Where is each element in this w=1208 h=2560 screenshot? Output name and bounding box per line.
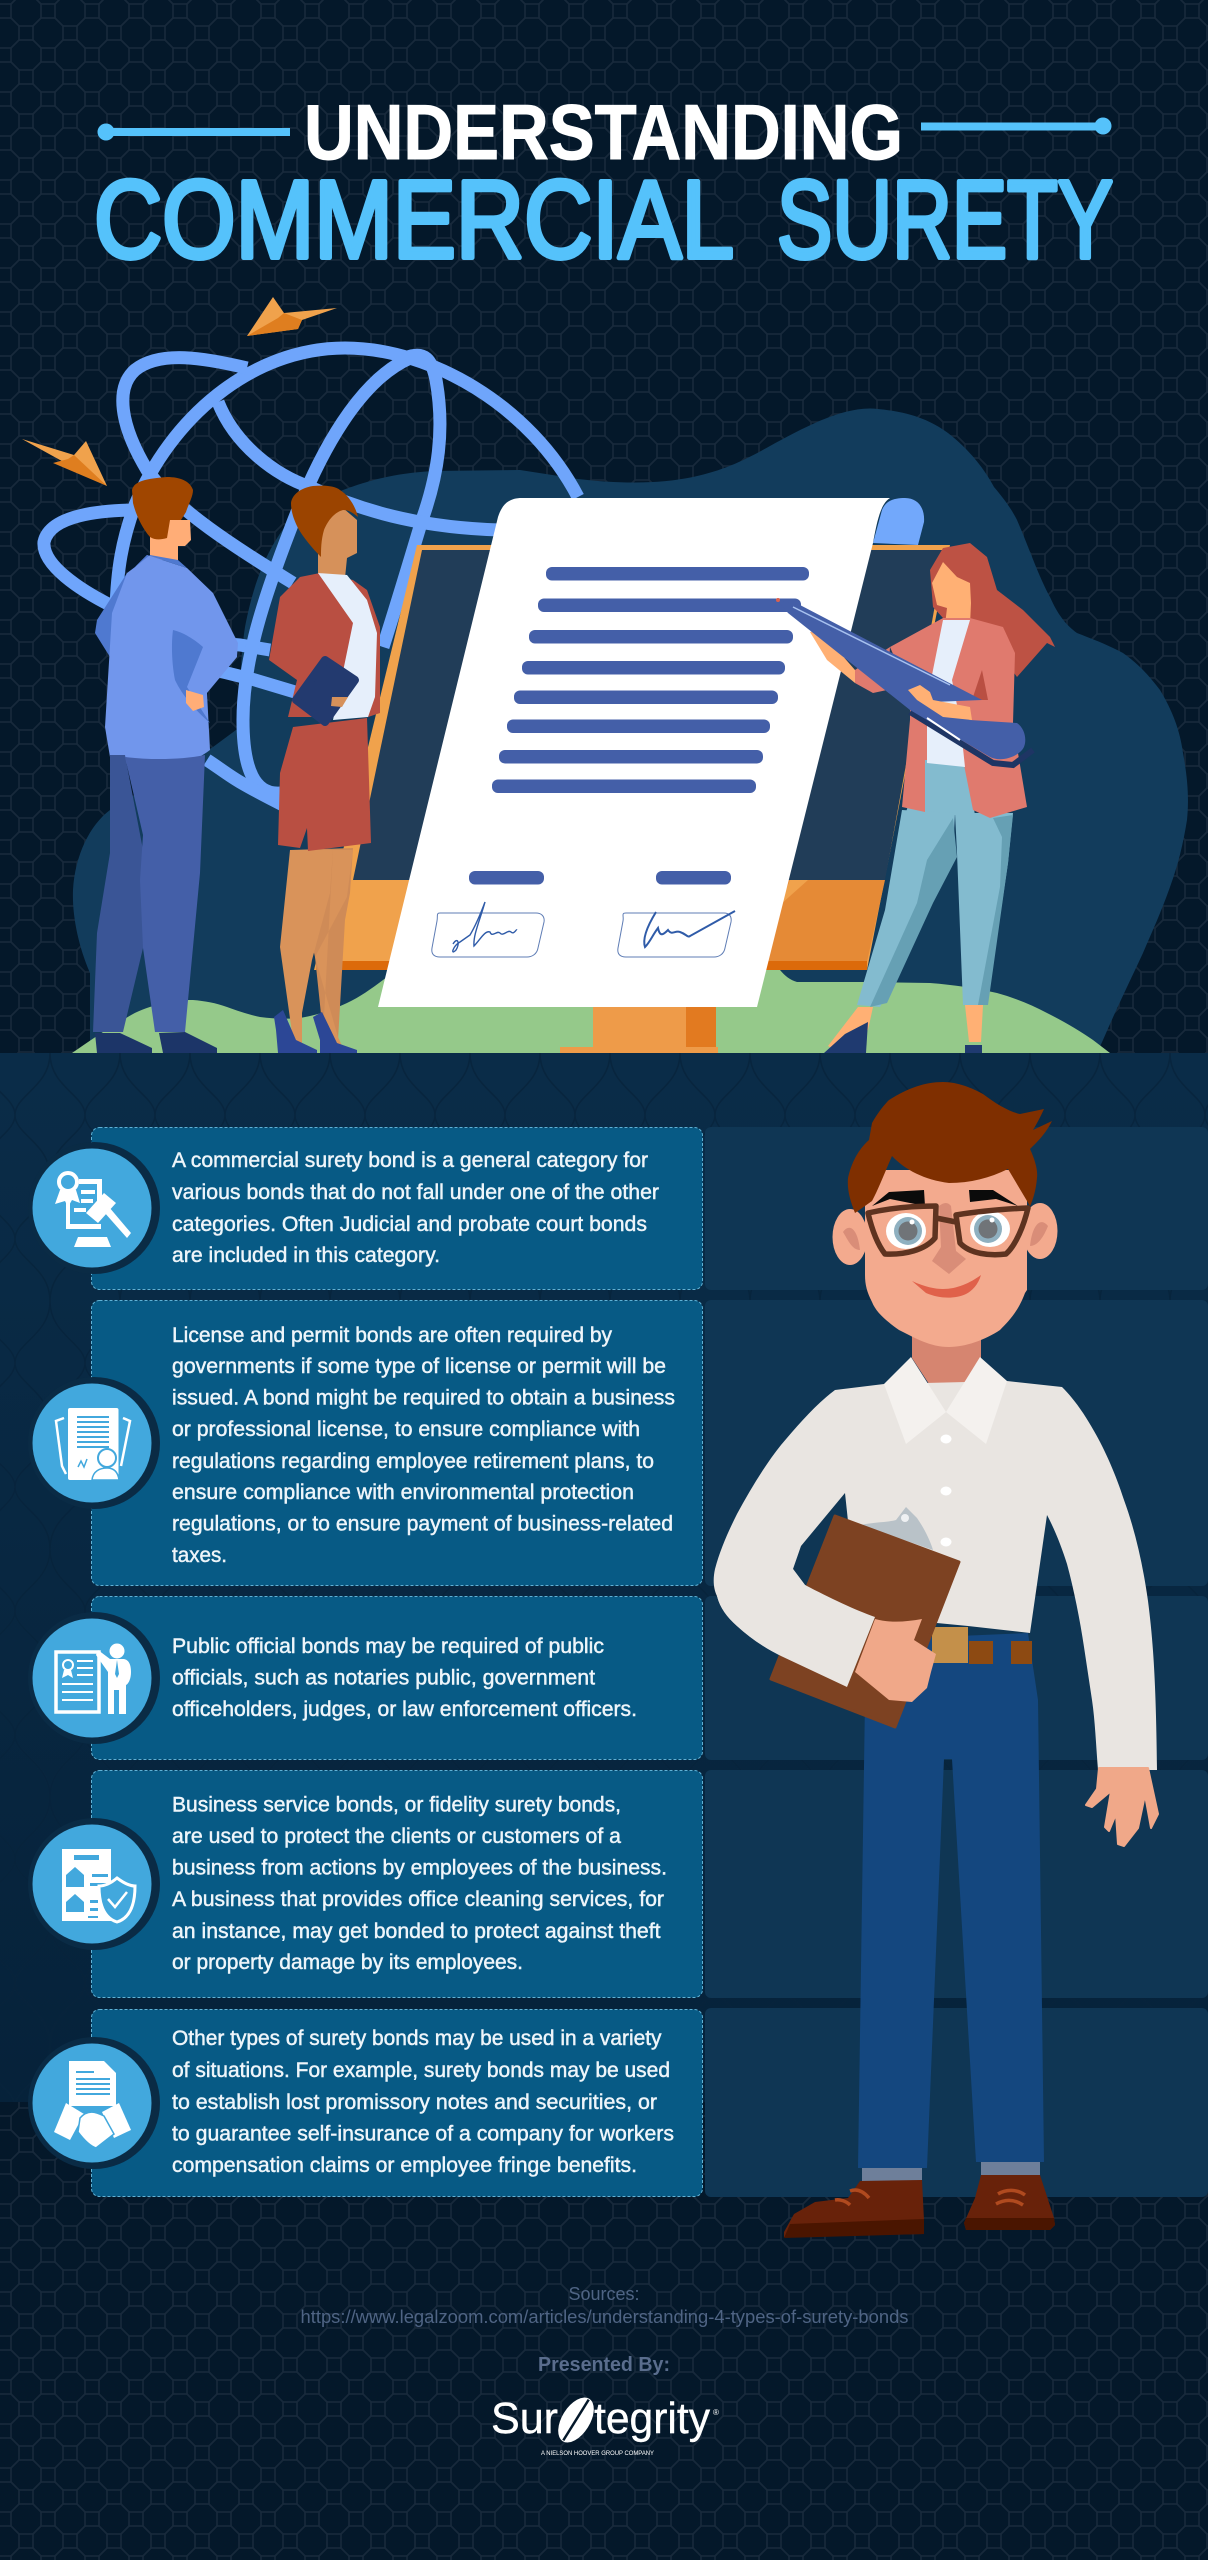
card five text: to guarantee self-insurance of a company for workers: [172, 2122, 674, 2146]
logo leaf: [551, 2391, 601, 2449]
clipboard: [771, 1516, 959, 1727]
title line two: COMMERCIAL: [94, 158, 734, 282]
card four text: are used to protect the clients or customers of a: [172, 1825, 621, 1848]
card five text: compensation claims or employee fringe benefits.: [172, 2154, 637, 2177]
card five icon badge: [28, 2037, 160, 2169]
large pen: [776, 598, 1033, 765]
man with clipboard: [714, 1082, 1158, 2238]
right band panels: [705, 1127, 1208, 2197]
card two text: or professional license, to ensure compliance with: [172, 1418, 640, 1441]
eyes: [886, 1211, 1010, 1249]
eyebrows: [872, 1190, 1018, 1206]
card two text: regulations regarding employee retirement plans, to: [172, 1450, 654, 1473]
face: [865, 1170, 1027, 1347]
card four text: A business that provides office cleaning services, for: [172, 1888, 664, 1911]
card two text: regulations, or to ensure payment of business-related: [172, 1512, 673, 1536]
document roll curl: [873, 498, 924, 545]
card five text: to establish lost promissory notes and securities, or: [172, 2091, 657, 2114]
icon: contract and handshake: [54, 2061, 131, 2148]
document text lines: [469, 567, 809, 884]
arm gap: [793, 1493, 875, 1617]
glasses: [868, 1206, 1028, 1255]
registered mark: ®: [713, 2408, 719, 2417]
woman shirt: [318, 573, 377, 720]
woman with pen: [776, 543, 1055, 1053]
woman jacket: [269, 573, 380, 717]
woman heels: [274, 1010, 357, 1053]
paper plane top: [247, 297, 337, 336]
card four text: or property damage by its employees.: [172, 1951, 523, 1974]
card two text: License and permit bonds are often required by: [172, 1324, 612, 1347]
shirt: [714, 1381, 1157, 1770]
card four text: Business service bonds, or fidelity surety bonds,: [172, 1794, 621, 1816]
card two text: issued. A bond might be required to obtain a business: [172, 1386, 675, 1410]
card four background: [92, 1770, 702, 1998]
left shoe: [784, 2180, 924, 2238]
belt: [932, 1627, 1032, 1664]
card three text: Public official bonds may be required of public: [172, 1635, 604, 1658]
green ground: [72, 960, 1110, 1053]
pen woman forearm: [810, 630, 890, 693]
logo wordmark end: tegrity: [594, 2394, 710, 2443]
signature two: [618, 911, 735, 957]
icon: licence document: [56, 1408, 130, 1480]
pen woman feet: [824, 1005, 983, 1053]
card four text: [172, 1794, 667, 1974]
icon: certificate and gavel: [55, 1173, 131, 1247]
woman clutch: [296, 660, 355, 722]
card five text: of situations. For example, surety bonds may be used: [172, 2059, 670, 2082]
ears: [832, 1203, 1058, 1265]
card three text: officeholders, judges, or law enforcement officers.: [172, 1698, 637, 1721]
sources: Sources:: [568, 2284, 640, 2304]
signature one: [432, 902, 544, 957]
man trousers: [93, 755, 205, 1032]
left hand: [855, 1619, 936, 1702]
hero illustration: [22, 297, 1188, 1053]
paper plane left: [22, 439, 107, 486]
card two icon badge: [28, 1377, 160, 1509]
title decorative line left: [98, 124, 290, 140]
info section background: [0, 1053, 1208, 2102]
nose: [932, 1203, 966, 1274]
icon: property list and shield: [62, 1849, 135, 1922]
woman in red: [269, 486, 380, 1053]
shirt buttons: [940, 1434, 952, 1546]
signed document: [378, 498, 890, 1007]
title decorative line right: [921, 118, 1112, 134]
card two text: ensure compliance with environmental protection: [172, 1481, 634, 1504]
pen woman hand: [908, 685, 972, 720]
card one text: are included in this category.: [172, 1244, 440, 1267]
right hand: [1086, 1768, 1158, 1846]
card one text: A commercial surety bond is a general category for: [172, 1149, 648, 1172]
logo wordmark: Sur: [491, 2394, 558, 2443]
panel: card one: [28, 1128, 702, 1290]
left sleeve over clipboard: [715, 1564, 875, 1687]
background blob: [73, 409, 1188, 1053]
card four icon badge: [28, 1818, 160, 1950]
globe: [44, 348, 578, 806]
man neck and face: [150, 520, 191, 560]
card one icon badge: [28, 1142, 160, 1274]
card five text: [172, 2027, 674, 2177]
woman legs: [280, 848, 353, 1048]
monitor stand: [560, 1000, 718, 1053]
woman hand: [331, 697, 348, 707]
card two text: taxes.: [172, 1544, 227, 1567]
card two text: governments if some type of license or permit will be: [172, 1355, 666, 1378]
card four text: an instance, may get bonded to protect against theft: [172, 1920, 661, 1943]
icon: official presenting document: [56, 1644, 131, 1714]
pen woman jacket: [890, 618, 1027, 818]
monitor: [314, 545, 950, 970]
man sweater: [105, 555, 238, 767]
man hair: [132, 477, 193, 539]
panel: card three: [28, 1596, 702, 1760]
man in blue: [93, 477, 238, 1053]
logo: [491, 2391, 719, 2457]
panel: card two: [28, 1300, 702, 1586]
pen woman hair: [930, 543, 1055, 677]
card one text: various bonds that do not fall under one of the other: [172, 1181, 659, 1204]
woman hair: [291, 486, 358, 557]
card one background: [92, 1128, 702, 1290]
card two text: [172, 1324, 675, 1567]
logo tagline: A NIELSON HOOVER GROUP COMPANY: [541, 2450, 655, 2457]
trousers: [858, 1633, 1044, 2168]
card three text: [172, 1635, 637, 1721]
woman face and neck: [318, 508, 357, 578]
sources: [300, 2284, 908, 2327]
title: [94, 88, 1113, 282]
card three background: [92, 1596, 702, 1760]
card three text: officials, such as notaries public, government: [172, 1666, 595, 1690]
panel: card four: [28, 1770, 702, 1998]
card one text: categories. Often Judicial and probate court bonds: [172, 1213, 647, 1236]
man shoes: [95, 1032, 217, 1053]
collar: [884, 1357, 1007, 1444]
socks: [862, 2162, 1040, 2181]
man hand: [186, 690, 204, 711]
card two background: [92, 1300, 702, 1586]
sources: https://www.legalzoom.com/articles/understanding-4-types-of-surety-bonds: [300, 2307, 908, 2327]
pen woman shirt: [927, 620, 970, 767]
card five background: [92, 2010, 702, 2196]
clipboard clip: [860, 1507, 933, 1550]
neck: [912, 1335, 981, 1410]
woman skirt: [278, 718, 371, 851]
card one text: [172, 1149, 659, 1267]
card four text: business from actions by employees of the business.: [172, 1856, 667, 1880]
presented by: Presented By:: [538, 2354, 670, 2376]
card three icon badge: [28, 1612, 160, 1744]
mouth: [912, 1275, 981, 1298]
jacket fold: [972, 670, 988, 700]
man dark sleeve: [95, 573, 127, 657]
card five text: Other types of surety bonds may be used in a variety: [172, 2027, 662, 2050]
title line one: UNDERSTANDING: [304, 88, 903, 176]
panel: card five: [28, 2010, 702, 2196]
pen woman trousers: [857, 755, 1013, 1007]
right shoe: [964, 2175, 1055, 2230]
pen woman face: [932, 562, 971, 625]
hair: [848, 1082, 1052, 1213]
